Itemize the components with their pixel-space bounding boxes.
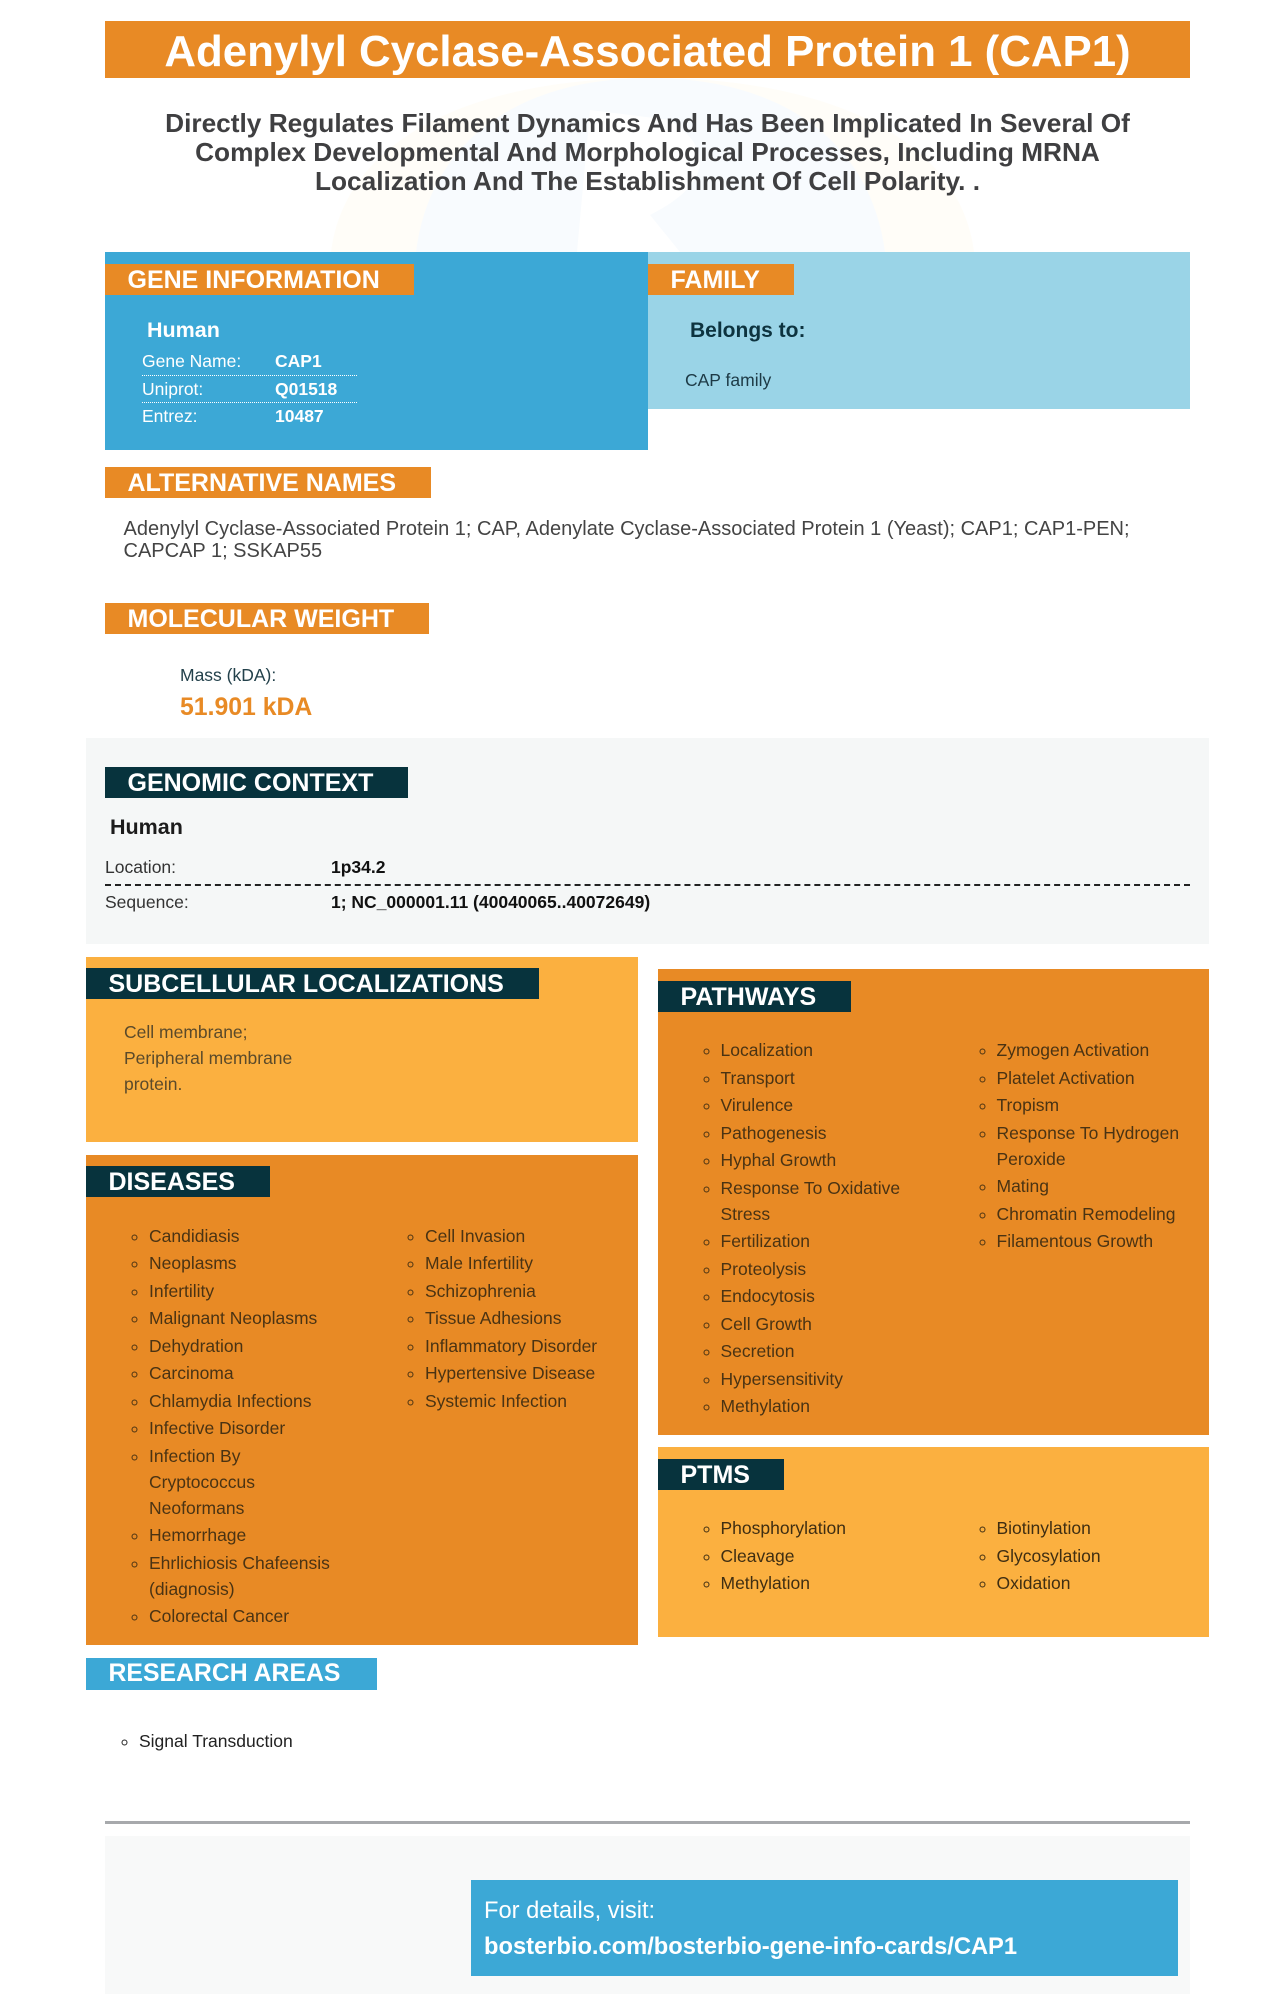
list: research areas: Signal Transduction bbox=[139, 1731, 293, 1751]
heading: research areas bbox=[86, 1658, 377, 1690]
heading: molecular weight: MOLECULAR WEIGHT bbox=[128, 605, 394, 633]
list: diseases column 1: Hemorrhage bbox=[149, 1525, 246, 1545]
list: pathways column 1: Localization bbox=[720, 1040, 813, 1060]
heading: pathways bbox=[658, 981, 851, 1012]
heading: pathways: PATHWAYS bbox=[680, 983, 816, 1011]
list: pathways column 1: Pathogenesis bbox=[720, 1123, 827, 1143]
panel: gene information bbox=[105, 252, 648, 450]
list: ptms column 1: Phosphorylation bbox=[720, 1518, 846, 1538]
background watermark bbox=[0, 0, 1288, 260]
list: pathways column 1 bbox=[704, 1040, 900, 1416]
location row bbox=[105, 857, 385, 877]
list: diseases column 1: (diagnosis) bbox=[149, 1579, 235, 1599]
list: diseases column 1: Infertility bbox=[149, 1281, 214, 1301]
list: ptms column 1: Cleavage bbox=[720, 1546, 794, 1566]
list: pathways column 2: Filamentous Growth bbox=[996, 1231, 1153, 1251]
list: diseases column 2: Male Infertility bbox=[425, 1253, 533, 1273]
list: pathways column 1: Hyphal Growth bbox=[720, 1150, 836, 1170]
family value: CAP family bbox=[685, 370, 771, 390]
list: diseases column 2: Schizophrenia bbox=[425, 1281, 536, 1301]
list: diseases column 1: Neoplasms bbox=[149, 1253, 237, 1273]
heading: subcellular localizations: SUBCELLULAR LOCALIZATIONS bbox=[108, 970, 504, 998]
heading: family: FAMILY bbox=[670, 266, 760, 294]
list: diseases column 2: Inflammatory Disorder bbox=[425, 1336, 597, 1356]
list: diseases column 2: Systemic Infection bbox=[425, 1391, 567, 1411]
list: pathways column 1: Proteolysis bbox=[720, 1259, 806, 1279]
list: pathways column 1: Secretion bbox=[720, 1341, 794, 1361]
list: ptms column 2 bbox=[980, 1518, 1101, 1593]
list: pathways column 2: Mating bbox=[996, 1176, 1049, 1196]
gene details table: Entrez: bbox=[142, 406, 197, 426]
list: pathways column 1: Stress bbox=[720, 1204, 770, 1224]
panel: ptms bbox=[658, 1447, 1209, 1637]
subtitle: Localization And The Establishment Of Cell Polarity. . bbox=[315, 166, 980, 196]
list: pathways column 1: Fertilization bbox=[720, 1231, 810, 1251]
list: pathways column 1: Response To Oxidative bbox=[720, 1178, 900, 1198]
subtitle bbox=[165, 108, 1130, 196]
footer rule bbox=[105, 1821, 1190, 1824]
sequence row: Sequence: bbox=[105, 892, 189, 912]
panel: subcellular localizations bbox=[86, 957, 638, 1142]
list: diseases column 1: Carcinoma bbox=[149, 1363, 234, 1383]
list: ptms column 1 bbox=[704, 1518, 846, 1593]
list: pathways column 2: Response To Hydrogen bbox=[996, 1123, 1179, 1143]
panel: pathways bbox=[658, 969, 1209, 1435]
heading: ptms bbox=[658, 1459, 784, 1490]
list: pathways column 1: Methylation bbox=[720, 1396, 810, 1416]
list: pathways column 2: Chromatin Remodeling bbox=[996, 1204, 1175, 1224]
gene details table: Q01518 bbox=[275, 379, 337, 399]
list: pathways column 1: Transport bbox=[720, 1068, 795, 1088]
panel: genomic context bbox=[86, 738, 1209, 944]
list: diseases column 1: Candidiasis bbox=[149, 1226, 239, 1246]
list: ptms column 2: Oxidation bbox=[996, 1573, 1070, 1593]
list: pathways column 2: Tropism bbox=[996, 1095, 1059, 1115]
list: diseases column 1: Colorectal Cancer bbox=[149, 1606, 289, 1626]
callout: details link bbox=[471, 1880, 1178, 1976]
gene details table: Uniprot: bbox=[142, 379, 203, 399]
species label: Human bbox=[147, 318, 220, 342]
subtitle: Directly Regulates Filament Dynamics And Has Been Implicated In Several Of bbox=[165, 108, 1130, 138]
location row: 1p34.2 bbox=[331, 857, 385, 877]
heading: genomic context: GENOMIC CONTEXT bbox=[128, 769, 373, 797]
list: diseases column 1: Chlamydia Infections bbox=[149, 1391, 311, 1411]
list: pathways column 1: Endocytosis bbox=[720, 1286, 815, 1306]
mass label: Mass (kDA): bbox=[180, 665, 276, 685]
list: diseases column 1: Infective Disorder bbox=[149, 1418, 285, 1438]
list: pathways column 2 bbox=[980, 1040, 1179, 1251]
list: diseases column 1: Dehydration bbox=[149, 1336, 243, 1356]
heading: research areas: RESEARCH AREAS bbox=[108, 1660, 340, 1687]
gene details table: Gene Name: bbox=[142, 351, 241, 371]
subtitle: Complex Developmental And Morphological Processes, Including MRNA bbox=[195, 137, 1100, 167]
gene details table: CAP1 bbox=[275, 351, 322, 371]
heading: ptms: PTMS bbox=[680, 1461, 750, 1489]
alternative names text: CAPCAP 1; SSKAP55 bbox=[124, 540, 322, 562]
localization text: protein. bbox=[124, 1074, 182, 1094]
list: ptms column 2: Biotinylation bbox=[996, 1518, 1091, 1538]
location row: Location: bbox=[105, 857, 176, 877]
list: diseases column 2: Tissue Adhesions bbox=[425, 1308, 562, 1328]
alternative names text bbox=[124, 518, 1130, 562]
list: pathways column 1: Cell Growth bbox=[720, 1314, 812, 1334]
list: diseases column 2 bbox=[408, 1226, 597, 1411]
list: pathways column 1: Hypersensitivity bbox=[720, 1369, 843, 1389]
list: pathways column 1: Virulence bbox=[720, 1095, 793, 1115]
list: ptms column 2: Glycosylation bbox=[996, 1546, 1101, 1566]
localization text: Cell membrane; bbox=[124, 1022, 248, 1042]
list: pathways column 2: Zymogen Activation bbox=[996, 1040, 1149, 1060]
gene details table bbox=[142, 351, 357, 426]
gene details table: 10487 bbox=[275, 406, 324, 426]
belongs to label: Belongs to: bbox=[690, 319, 806, 342]
localization text: Peripheral membrane bbox=[124, 1048, 292, 1068]
panel: family bbox=[648, 252, 1190, 409]
title: Adenylyl Cyclase-Associated Protein 1 (CAP1) bbox=[164, 27, 1131, 76]
heading: family bbox=[648, 264, 794, 295]
list: pathways column 2: Peroxide bbox=[996, 1149, 1066, 1169]
heading: diseases bbox=[86, 1166, 270, 1197]
panel: footer bbox=[105, 1836, 1190, 1994]
species label: Human bbox=[110, 815, 183, 839]
alternative names text: Adenylyl Cyclase-Associated Protein 1; CAP, Adenylate Cyclase-Associated Protein 1 (Yeast); CAP1; CAP1-PEN; bbox=[124, 518, 1130, 540]
list: diseases column 2: Hypertensive Disease bbox=[425, 1363, 595, 1383]
list: diseases column 1: Ehrlichiosis Chafeensis bbox=[149, 1553, 330, 1573]
list: diseases column 1 bbox=[132, 1226, 330, 1626]
mass value: 51.901 kDA bbox=[180, 694, 312, 721]
panel: diseases bbox=[86, 1155, 638, 1645]
list: diseases column 1: Malignant Neoplasms bbox=[149, 1308, 317, 1328]
list: diseases column 2: Cell Invasion bbox=[425, 1226, 525, 1246]
heading: diseases: DISEASES bbox=[108, 1168, 235, 1196]
sequence row bbox=[105, 884, 1190, 912]
list: diseases column 1: Cryptococcus bbox=[149, 1472, 255, 1492]
callout text: For details, visit: bbox=[484, 1898, 655, 1924]
sequence row: 1; NC_000001.11 (40040065..40072649) bbox=[331, 892, 650, 912]
callout url: bosterbio.com/bosterbio-gene-info-cards/CAP1 bbox=[484, 1934, 1017, 1960]
list: diseases column 1: Infection By bbox=[149, 1446, 240, 1466]
localization text bbox=[124, 1022, 292, 1094]
list: diseases column 1: Neoformans bbox=[149, 1498, 244, 1518]
list: ptms column 1: Methylation bbox=[720, 1573, 810, 1593]
heading: alternative names: ALTERNATIVE NAMES bbox=[128, 469, 396, 497]
list: pathways column 2: Platelet Activation bbox=[996, 1068, 1135, 1088]
heading: gene information: GENE INFORMATION bbox=[128, 266, 380, 294]
